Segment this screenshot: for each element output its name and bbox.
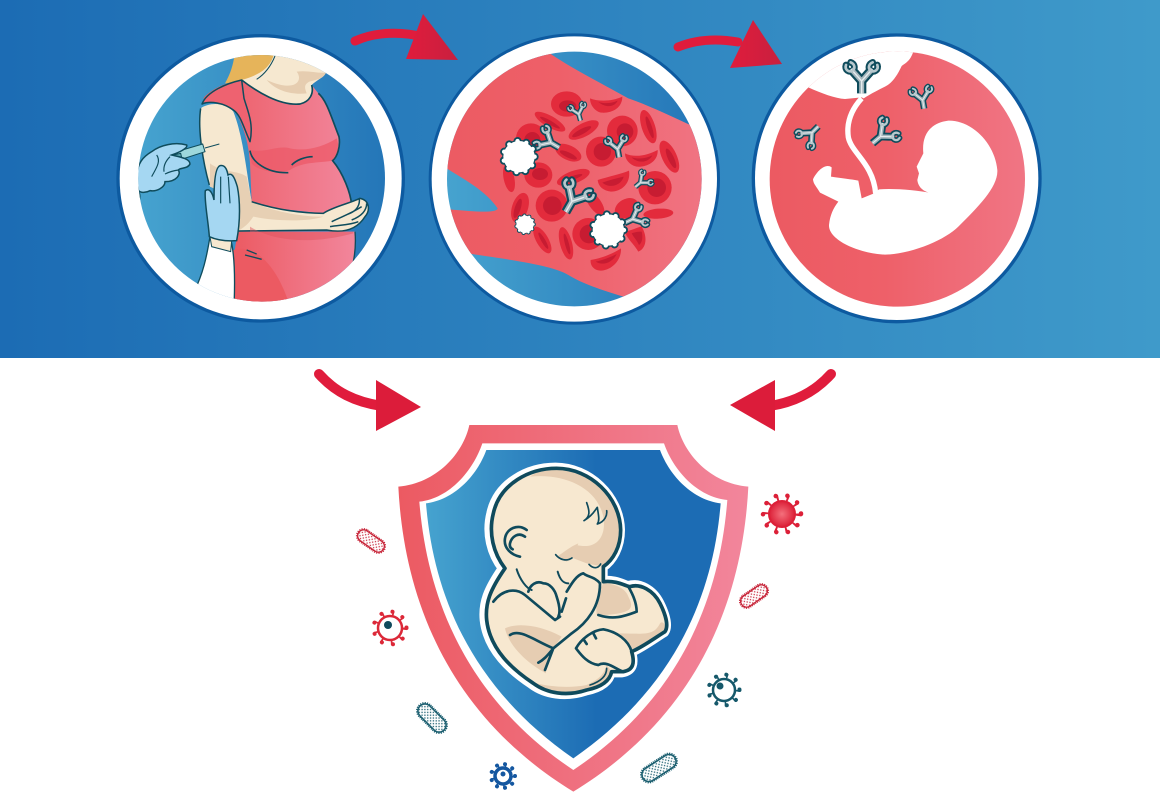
fetus silhouette: [813, 121, 997, 255]
antibody: [532, 125, 565, 158]
arrow: right curved arrow to shield: [730, 374, 831, 431]
antibody: [605, 135, 630, 159]
arrow: bloodstream to placenta: [678, 20, 782, 68]
bacterium: red right: [738, 582, 770, 610]
shield white border: [419, 443, 727, 770]
baby outline and features: [486, 468, 667, 693]
bacterium: teal lower right: [639, 752, 679, 784]
bacterium: teal lower left: [415, 701, 449, 735]
red blood cells: [501, 91, 683, 271]
placenta notch and umbilical cord: [808, 51, 913, 194]
virus: blue: [491, 764, 515, 788]
dress skirt: [233, 232, 356, 307]
panel: pregnant woman receiving vaccine: [116, 34, 405, 323]
glove: injecting hand: [138, 142, 191, 200]
nurse sleeve and arm: [197, 238, 236, 299]
antibody: [864, 116, 901, 154]
bacterium: red upper left: [355, 527, 387, 555]
pathogen: [593, 214, 624, 246]
antibody: [552, 177, 595, 220]
virus: red outline left: [374, 612, 406, 644]
antibody: [846, 62, 878, 93]
pathogen: [516, 216, 534, 233]
upper arm and forearm: [200, 104, 368, 262]
virus: teal outline: [708, 674, 740, 706]
skin shading: [505, 468, 665, 693]
shield with protected baby: [398, 425, 748, 792]
antibody: [620, 203, 650, 233]
antibody: [630, 169, 654, 194]
virus: red filled: [763, 495, 801, 533]
neck and chin: [242, 56, 326, 104]
panel: antibodies crossing the placenta to the fetus: [752, 33, 1042, 323]
blood vessel: [448, 54, 702, 296]
arrow: left curved arrow to shield: [319, 374, 421, 431]
antibody: [909, 85, 935, 111]
shield blue field: [426, 450, 721, 758]
shield outer: [398, 425, 748, 792]
baby: [485, 468, 667, 693]
sleeve: [202, 80, 251, 142]
antibody: [568, 102, 589, 123]
pathogen: [503, 141, 535, 172]
hair: [225, 55, 274, 84]
antibody: [794, 118, 826, 150]
dress top: [203, 80, 352, 213]
glove: supporting hand: [205, 166, 239, 241]
panel: antibodies in the bloodstream: [429, 33, 720, 325]
syringe: [174, 143, 220, 158]
top banner background: [0, 0, 1160, 358]
arrow: vaccination to bloodstream: [355, 14, 458, 60]
